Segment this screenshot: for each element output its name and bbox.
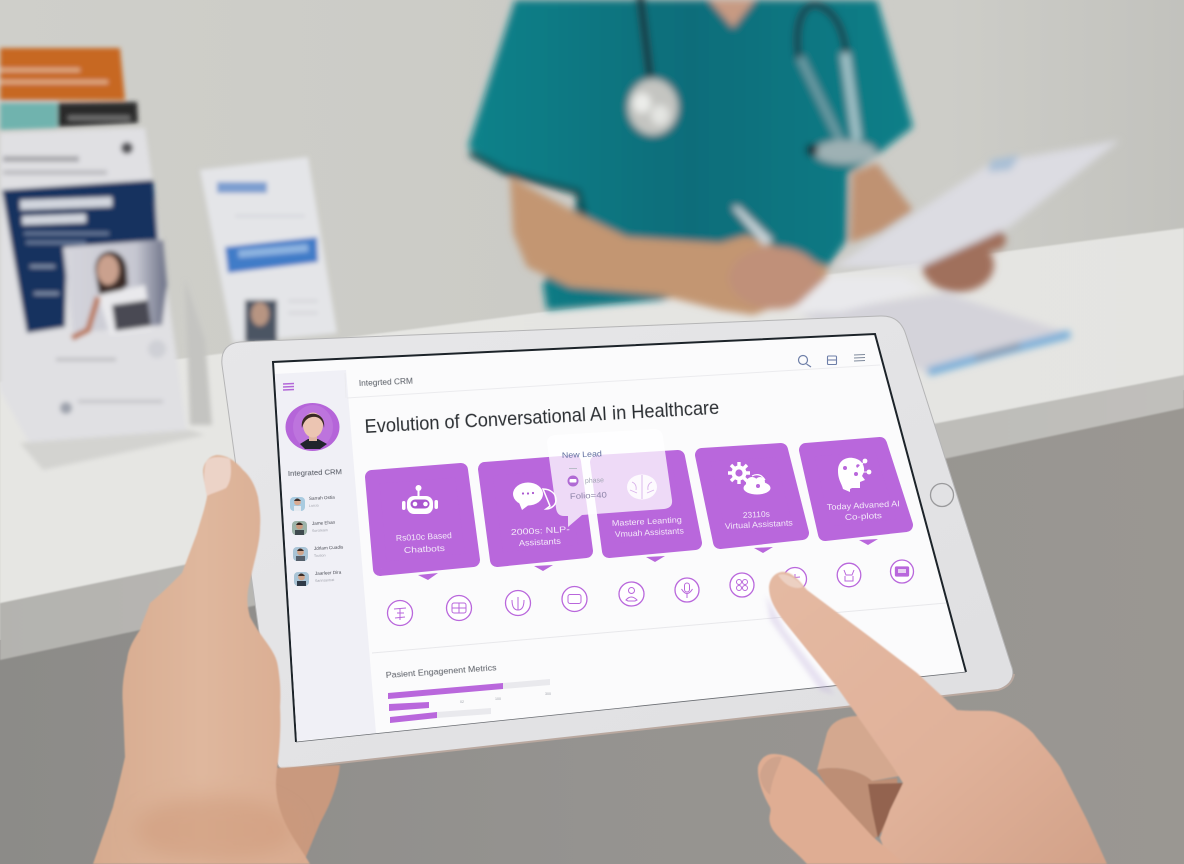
card 4: virtual assistants: [702, 450, 802, 553]
pointing index finger and back of hand: [769, 572, 1107, 864]
teal brochure: [0, 103, 57, 130]
card 3: machine learning virtual assistants: [597, 457, 695, 562]
metrics divider: [372, 603, 946, 653]
card 1: rule-based chatbots: Chatbots: [404, 543, 445, 555]
patient 2: Sorcileam: [312, 528, 328, 533]
popup: new lead: Folio=40: [570, 490, 608, 501]
hand and thumb: [93, 455, 310, 864]
metric bar 2: [389, 702, 429, 711]
scrub top: [468, 0, 913, 310]
card 3 label: Mastere Leanting: [612, 515, 683, 528]
nurse arm right: [850, 163, 913, 243]
icon 10: [890, 560, 914, 583]
thumb nail: [204, 457, 231, 496]
icon: clipboard: [828, 356, 836, 364]
icon: AI head: [838, 458, 871, 492]
patient 3: Jdrlam Cuadis: [314, 544, 344, 551]
hand shading: [135, 796, 295, 864]
metrics heading: Pasient Engagenent Metrics: [385, 662, 497, 680]
icon: speech bubbles: [513, 482, 556, 510]
header title: Integrted CRM: [359, 377, 413, 388]
header divider: [347, 365, 880, 398]
main brochure sheet: [0, 128, 187, 450]
patient 2: [292, 520, 336, 535]
patient 1: Sarrah Ostia: [309, 495, 335, 501]
axis ticks: 02: [460, 700, 464, 704]
icon: search: [798, 356, 811, 367]
orange brochure: [0, 48, 125, 100]
icon: gear and cloud: [728, 462, 770, 494]
screen edge: [273, 334, 966, 742]
second brochure: [200, 157, 337, 343]
metric bar 3: [390, 708, 491, 723]
brochure display: [0, 48, 337, 470]
background: reception counter: [0, 228, 1184, 660]
home button: [930, 484, 954, 506]
icon: popup badge: [568, 476, 578, 486]
card 2 label: 2000s: NLP-: [511, 524, 570, 537]
icon 8: [784, 568, 806, 590]
axis ticks: 100: [495, 697, 501, 701]
icon 4: [562, 586, 587, 612]
brochure lower text: [56, 358, 116, 361]
sidebar heading: Integrated CRM: [288, 467, 342, 478]
popup: new lead: [547, 429, 672, 527]
icon 1: [388, 600, 412, 626]
pen: [732, 206, 773, 246]
curled middle finger: [817, 716, 905, 781]
avatar: [286, 403, 340, 451]
card 5 label: Today Advaned AI: [827, 499, 900, 512]
icon 2: [446, 596, 472, 620]
hamburger icon: [283, 384, 294, 390]
nurse arm left: [510, 177, 827, 315]
patient 1: Lorcio: [309, 503, 319, 508]
patient 4: Sarinsantrat: [315, 578, 334, 583]
finger shadow on screen: [766, 595, 835, 695]
card 2: NLP assistants: Assistants: [519, 536, 561, 548]
curled ring finger: [817, 768, 900, 840]
patient 1: [290, 495, 335, 511]
black brochure: [58, 102, 138, 127]
patient 4: Jaarleer Dira: [315, 570, 342, 576]
icon 9: [837, 563, 861, 587]
acrylic holder base: [20, 430, 205, 470]
card 1 label: Rs010c Based: [396, 530, 452, 543]
thumb: [758, 754, 905, 864]
tablet body: [222, 316, 1013, 769]
navy brochure panel: [2, 180, 158, 333]
nurse in teal scrubs: [468, 0, 1120, 372]
nurse holding hand: [922, 229, 1006, 292]
icon: brain: [627, 474, 657, 500]
card 5: advanced AI co-pilots: Co-plots: [845, 511, 882, 522]
thumb nail shading: [760, 757, 782, 795]
right hand pointing: [758, 572, 1107, 864]
screen: [273, 334, 966, 742]
patient list: [290, 495, 344, 586]
sleeve shadows: [470, 153, 584, 216]
left hand holding tablet: [93, 455, 340, 864]
axis ticks: 300: [545, 692, 551, 696]
card 4: virtual assistants: Virtual Assistants: [725, 518, 793, 531]
nurse writing hand: [729, 247, 821, 309]
card 5: advanced AI co-pilots: [806, 444, 906, 545]
card 1: rule-based chatbots: [372, 470, 473, 580]
sidebar: [275, 370, 376, 741]
icon: robot: [402, 485, 438, 514]
held clipboard paper: [834, 140, 1120, 267]
counter papers with blue stripe: [800, 293, 1069, 372]
card 3: machine learning virtual assistants: Vmuah Assistants: [615, 526, 684, 539]
patient 4: [294, 570, 342, 586]
metrics panel: [385, 662, 551, 723]
popup: new lead: phase: [585, 477, 604, 485]
fingernail: [778, 574, 803, 588]
background: floor: [0, 390, 1184, 864]
icon 3: [506, 590, 530, 616]
card 2: NLP assistants: [485, 462, 586, 571]
icon: menu lines: [854, 354, 865, 361]
icon 5: [619, 582, 644, 606]
tablet: [222, 316, 1014, 769]
metric bar 1: [388, 679, 550, 699]
finger fold shadow: [868, 783, 903, 838]
card 4 label: 23110s: [743, 510, 770, 520]
patient 3: Toution: [314, 553, 326, 558]
stethoscope: [628, 0, 876, 164]
popup text: New Lead: [562, 449, 602, 460]
acrylic holder shadow: [0, 280, 45, 385]
icon 6: [675, 578, 699, 602]
icon 7: [730, 573, 754, 597]
axis ticks: [460, 692, 551, 704]
brochure photo of woman: [63, 240, 167, 333]
patient 3: [293, 544, 344, 561]
patient 2: Jame Ehan: [312, 520, 336, 526]
palm behind tablet: [180, 765, 340, 864]
icon row: [388, 560, 914, 626]
main title: Evolution of Conversational AI in Healthcare: [364, 397, 720, 438]
neck V: [709, 0, 755, 28]
